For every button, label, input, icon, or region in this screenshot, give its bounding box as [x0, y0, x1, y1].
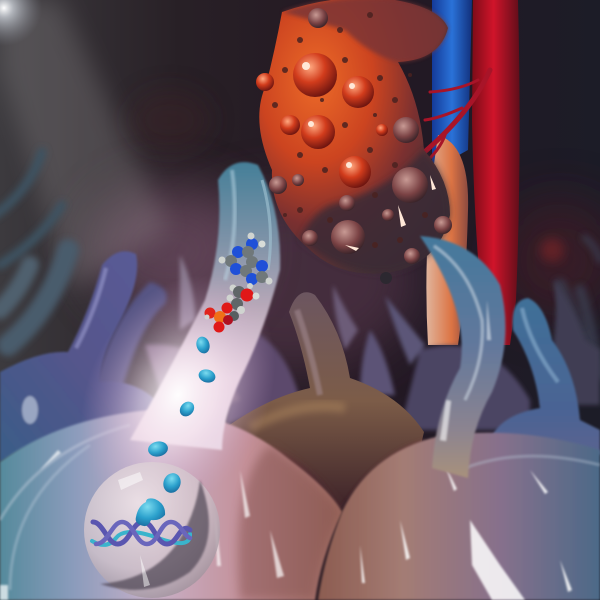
blood vessels [415, 0, 520, 345]
hormone droplets [147, 335, 217, 495]
right mound [318, 433, 600, 600]
artery branches [415, 70, 490, 166]
artery [472, 0, 520, 345]
gland [256, 0, 452, 284]
deep cleft between mounds [235, 440, 425, 540]
purple villus left [0, 251, 165, 462]
hormone molecule [204, 232, 272, 332]
blurred background villi right [560, 238, 600, 375]
blue villus far right [490, 298, 600, 455]
upper lobe [282, 0, 448, 62]
mid-ground blurred villi [95, 255, 600, 430]
light beam from top left [0, 0, 170, 290]
middle brown villus and bowl [220, 292, 424, 510]
left mound shadow [238, 445, 342, 600]
DNA helix [92, 522, 190, 545]
background tint [90, 90, 600, 370]
sphere dark crescent [100, 480, 209, 590]
protein on DNA [136, 498, 165, 526]
light glow [44, 244, 312, 546]
orange vessel [426, 135, 468, 345]
glowing tall villus [130, 162, 280, 450]
blurred background villi left [0, 152, 68, 345]
gland pores [272, 12, 428, 248]
vein [432, 0, 472, 170]
dark lower lobe [300, 150, 450, 273]
sphere with DNA [84, 462, 220, 598]
left mound [0, 410, 342, 600]
right tall villus [420, 236, 505, 478]
gland highlights [302, 62, 436, 251]
gland bubbles [293, 53, 337, 97]
